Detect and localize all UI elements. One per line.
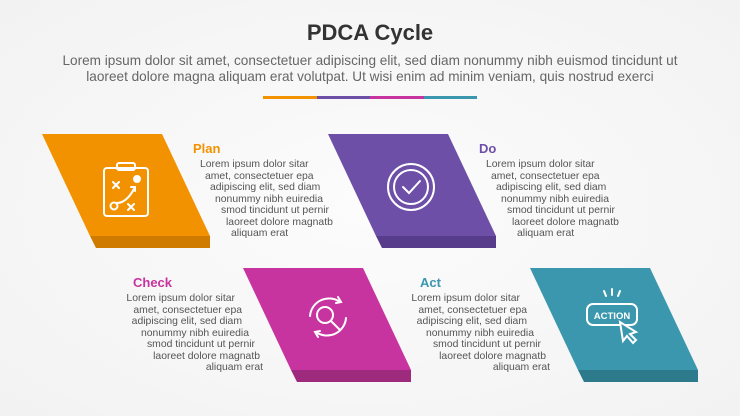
icon: action button: ACTION xyxy=(594,311,630,322)
title: PDCA Cycle xyxy=(307,20,433,45)
text: do: Lorem ipsum dolor sitar xyxy=(486,159,595,170)
text: plan: adipiscing elit, sed diam xyxy=(210,182,320,193)
text: do: laoreet dolore magnatb xyxy=(512,216,619,228)
text: act: aliquam erat xyxy=(493,362,550,373)
shape: plan xyxy=(42,134,210,248)
subtitle: laoreet dolore magna aliquam erat volutpat. Ut wisi enim ad minim veniam, quis nostrud exerci xyxy=(86,69,654,84)
text: check: smod tincidunt ut pernir xyxy=(147,339,255,350)
text: check: amet, consectetuer epa xyxy=(133,304,242,316)
text: do: amet, consectetuer epa xyxy=(491,170,600,182)
text: do: Do xyxy=(479,141,496,156)
text: act: Lorem ipsum dolor sitar xyxy=(411,293,520,304)
text: check: nonummy nibh euiredia xyxy=(141,328,249,338)
text: act: Act xyxy=(420,275,441,290)
text: act: nonummy nibh euiredia xyxy=(426,328,534,338)
color divider xyxy=(263,96,477,99)
icon: check circle xyxy=(388,164,434,210)
text: act: smod tincidunt ut pernir xyxy=(433,339,541,350)
text: check: Lorem ipsum dolor sitar xyxy=(126,293,235,304)
text: plan: Plan xyxy=(193,141,220,156)
text: check: aliquam erat xyxy=(206,362,263,373)
text: do: smod tincidunt ut pernir xyxy=(507,205,615,216)
shape: check xyxy=(243,268,411,382)
shape: do xyxy=(328,134,496,248)
text: check: laoreet dolore magnatb xyxy=(153,350,260,362)
text: plan: smod tincidunt ut pernir xyxy=(221,205,329,216)
text: plan: Lorem ipsum dolor sitar xyxy=(200,159,309,170)
text: check: adipiscing elit, sed diam xyxy=(132,316,242,327)
subtitle xyxy=(62,53,678,84)
text: plan: nonummy nibh euiredia xyxy=(215,194,323,204)
text: act: adipiscing elit, sed diam xyxy=(417,316,527,327)
text: plan: laoreet dolore magnatb xyxy=(226,216,333,228)
icon: search cycle xyxy=(310,297,346,337)
text: do: adipiscing elit, sed diam xyxy=(496,182,606,193)
text: do: aliquam erat xyxy=(517,228,574,239)
text: act: laoreet dolore magnatb xyxy=(439,350,546,362)
subtitle: Lorem ipsum dolor sit amet, consectetuer adipiscing elit, sed diam nonummy nibh euismod tincidunt ut xyxy=(62,53,678,68)
text: act: amet, consectetuer epa xyxy=(418,304,527,316)
shape: act xyxy=(530,268,698,382)
icon: clipboard xyxy=(104,163,148,216)
text: check: Check xyxy=(133,275,172,290)
icon: action button xyxy=(587,289,637,343)
text: plan: amet, consectetuer epa xyxy=(205,170,314,182)
text: do: nonummy nibh euiredia xyxy=(501,194,609,204)
text: plan: aliquam erat xyxy=(231,228,288,239)
